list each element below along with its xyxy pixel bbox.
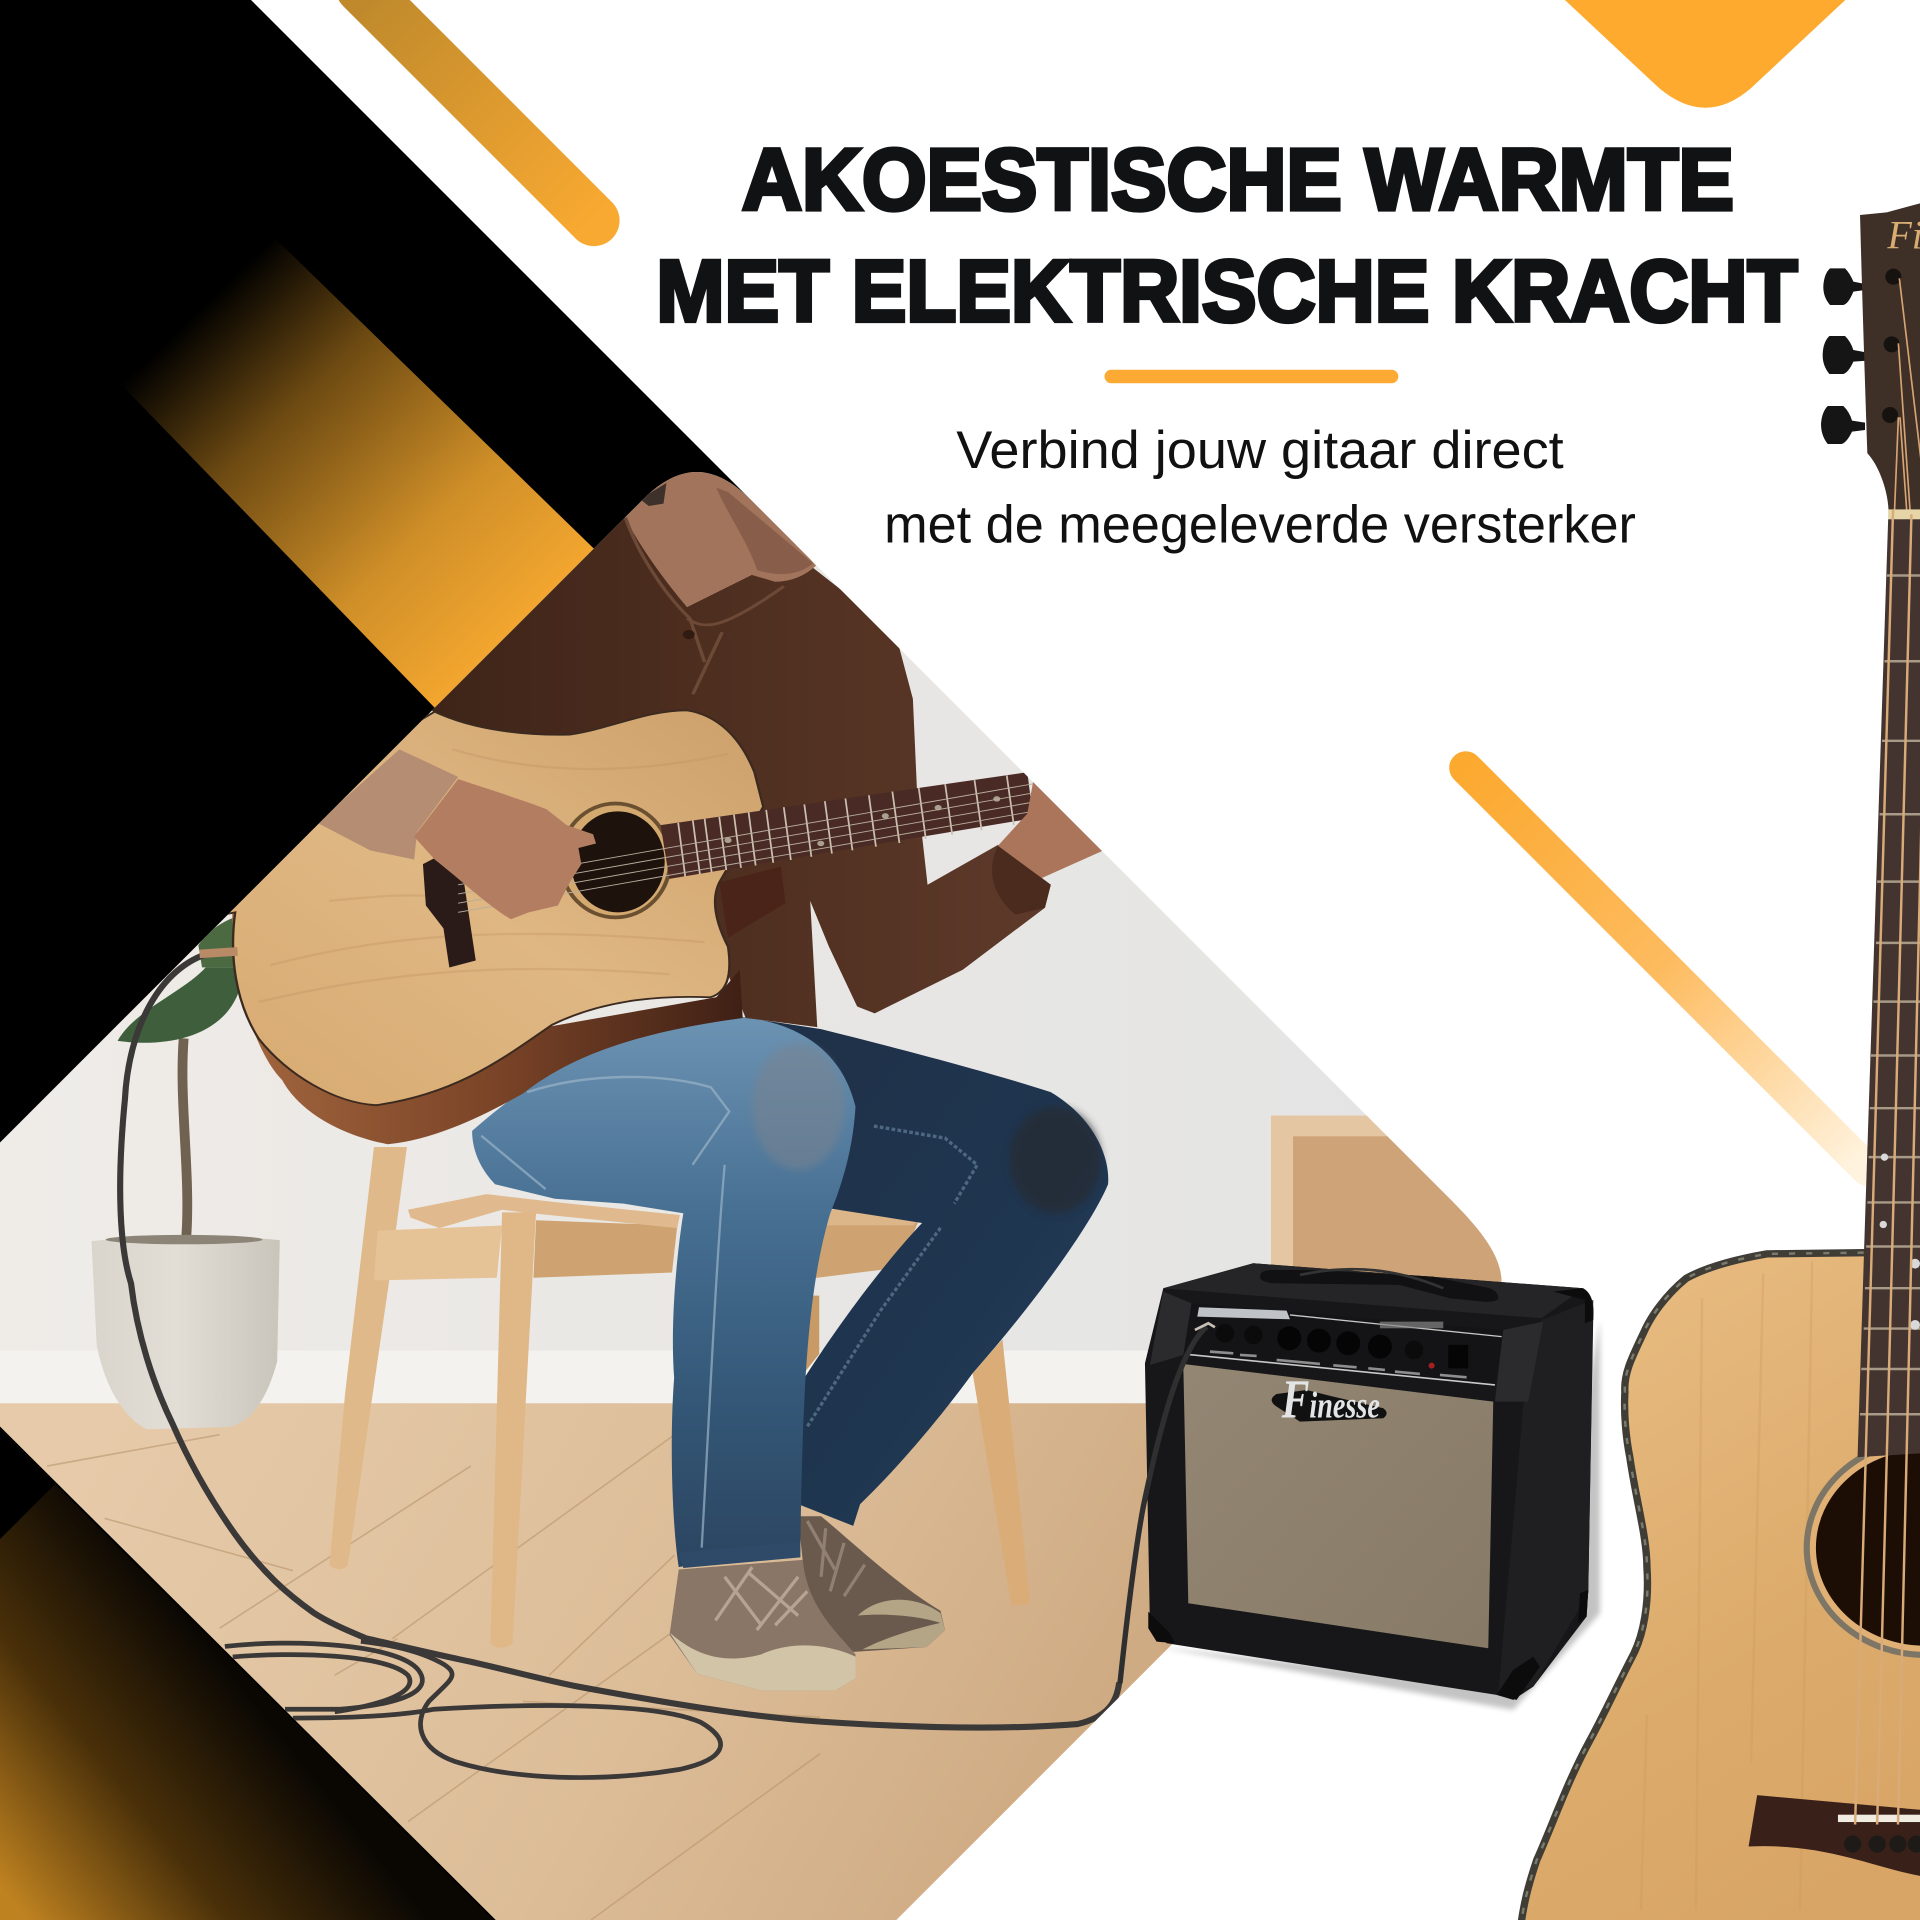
body binding inlay [1520,1253,1864,1920]
side orange fading stripe [1466,768,1867,1169]
neck and chin [625,467,816,607]
strumming hand [414,779,596,919]
chair [329,1147,1030,1648]
bottom left black corner [0,1424,496,1920]
guitar top [200,710,763,1105]
jack plug [200,951,238,954]
knee shading [1009,1107,1101,1213]
nut [1888,509,1920,519]
string posts [1882,269,1901,423]
fretboard [661,772,1033,879]
black diagonal panel [0,0,796,1341]
soundhole ring [1804,1438,1920,1658]
jeans cuff [679,1542,800,1568]
plant [118,916,239,1239]
amp input cable [1120,1327,1207,1683]
headstock and tuners [1821,203,1920,580]
front shoe [670,1560,856,1691]
hair [640,483,666,506]
top right orange tab [1565,0,1845,108]
title line 2: MET ELEKTRISCHE KRACHT [656,243,1798,340]
strings [458,784,1033,912]
divider [1104,370,1398,383]
back leg stitching [807,1126,977,1427]
guitar body [1520,1253,1920,1920]
shirt buttons [683,630,695,639]
amp shadow [1157,1320,1600,1710]
guitar bridge [423,855,476,967]
amp textured panels [1150,1292,1543,1402]
guitar side [232,912,743,1144]
wood grain [259,749,728,1002]
strings [1855,509,1920,1824]
amp side face [1498,1300,1593,1695]
sleeve [317,749,458,860]
amp handle [1260,1269,1498,1302]
subtitle [884,421,1636,554]
beard shadow [716,488,813,574]
amp cabinet [1145,1263,1593,1700]
control panel [1183,1303,1503,1385]
guitar bridge [1749,1795,1920,1876]
guitar cable [120,953,1119,1778]
back leg jeans [743,1017,1108,1526]
subtitle line 2: met de meegeleverde versterker [884,495,1636,554]
top orange stripe [361,0,594,220]
headstock strings [1892,278,1920,580]
soundhole [1816,1450,1920,1646]
headstock plate [1860,203,1920,517]
title [656,131,1798,340]
bottom left gradient corner [0,1484,493,1920]
sleeve cuff [992,846,1051,915]
chair near legs and seat [329,1147,680,1648]
collar and placket [625,517,784,694]
subtitle line 1: Verbind jouw gitaar direct [956,421,1564,480]
wooden cabinet [1271,1116,1502,1282]
upper body and guitar [200,467,1104,1144]
wooden floor [0,1403,1172,1920]
amp corners [1148,1288,1593,1700]
front leg seams [481,1077,729,1548]
front leg jeans [472,1017,856,1567]
amplifier [1120,1263,1600,1710]
wall [0,472,1366,1350]
chair far legs and rear rail [798,1206,1030,1606]
neck [1858,519,1920,1457]
amp grille [1183,1364,1493,1648]
tuner buttons [1821,268,1867,444]
fretting hand [998,781,1104,887]
title line 1: AKOESTISCHE WARMTE [742,131,1734,228]
shirt [432,515,1051,1027]
right guitar [1520,203,1920,1920]
plant pot [92,1235,280,1429]
amp logo badge: Finesse [1281,1368,1380,1429]
amp top face [1163,1263,1583,1318]
amp input plug [1195,1323,1215,1330]
baseboard [298,1350,1148,1403]
wood grain [1641,1261,1812,1910]
legs and shoes [472,1017,1108,1691]
soundhole [558,802,672,919]
knee highlight [752,1044,844,1170]
orange gradient band [116,239,596,708]
photo: guitarist seated on chair [0,441,1543,1920]
cutaway and strap [719,866,786,938]
back shoe [798,1516,945,1652]
